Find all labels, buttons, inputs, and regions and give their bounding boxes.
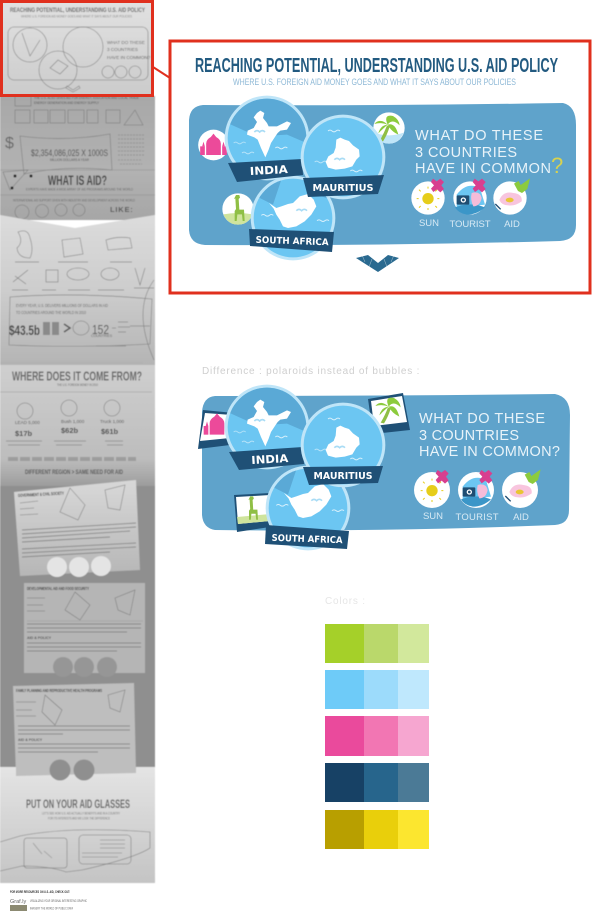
card 3: AID & POLICY bbox=[18, 738, 43, 742]
icon labels: SUN bbox=[419, 218, 439, 229]
scroll chevron bbox=[356, 255, 399, 272]
sketch section: title and hero: WHERE U.S. FOREIGN AID MONEY GOES AND WHAT IT SAYS ABOUT OUR POLICIES bbox=[21, 14, 132, 18]
icon: sun bbox=[414, 470, 450, 508]
card 3 bbox=[13, 683, 136, 776]
sketch section: where does it come from: $62b bbox=[61, 426, 79, 435]
sketch section: what is aid: $2,354,086,025 X 1000S bbox=[31, 148, 108, 158]
sketch section: what is aid: ENERGY GENERATION AND ENERGY SUPPLY bbox=[34, 101, 99, 105]
red highlight frame bbox=[170, 41, 590, 293]
swatch row: navy bbox=[325, 763, 429, 802]
connector arrow bbox=[153, 67, 170, 78]
footer resources: VISUALIZING YOUR ORIGINAL INTERESTING GRAPHIC bbox=[30, 899, 87, 903]
sketch section: aid glasses: LET'S SEE HOW U.S. AID ACTUALLY BENEFITS AND IN A COUNTRY bbox=[42, 812, 120, 816]
question heading: WHAT DO THESE bbox=[415, 128, 543, 144]
polaroid: giraffe bbox=[234, 493, 270, 532]
sketch section: aid categories and spending bbox=[0, 215, 155, 365]
footer resources: IMAGERY THE WORLD OF PUBLIC DATA bbox=[30, 906, 73, 910]
sketch section: aid categories and spending: $43.5b bbox=[9, 322, 40, 338]
sketch section: what is aid: LIKE: bbox=[110, 205, 134, 214]
sketch section: title and hero bbox=[0, 0, 153, 96]
question heading bbox=[419, 411, 560, 460]
country: south africa: SOUTH AFRICA bbox=[255, 235, 330, 248]
icon labels: TOURIST bbox=[456, 512, 499, 523]
sketch section: what is aid: INTERNATIONAL AID SUPPORT GIVEN WITH INDUSTRY AND DEVELOPMENT ACROSS THE WORLD bbox=[13, 198, 135, 202]
icon: giraffe bubble bbox=[222, 193, 254, 225]
icon labels: AID bbox=[504, 219, 520, 230]
footer resources: FOR MORE RESOURCES ON U.S. AID, CHECK OUT: bbox=[10, 890, 70, 894]
icon: tourist bbox=[458, 470, 494, 508]
swatch row: light blue bbox=[325, 670, 429, 709]
sketch section: what is aid: THE U.S. ALSO GIVES AID FOR ENERGY, EDUCATION AND LOCAL TRADE bbox=[34, 96, 139, 100]
country: india: INDIA bbox=[250, 163, 289, 178]
blue panel bbox=[189, 103, 576, 245]
sketch section: what is aid: $ bbox=[5, 135, 14, 152]
note: colors: Colors : bbox=[325, 596, 366, 607]
country: india bbox=[224, 95, 310, 182]
question heading: ? bbox=[551, 153, 563, 178]
country: mauritius bbox=[301, 403, 385, 487]
country: mauritius bbox=[301, 115, 385, 199]
card 1 bbox=[14, 480, 140, 577]
swatch row: yellow bbox=[325, 810, 429, 849]
thumbnail highlight box bbox=[2, 2, 152, 96]
country: south africa bbox=[265, 465, 351, 551]
polaroid: palm bbox=[368, 393, 410, 434]
sketch section: what is aid: MILLION DOLLARS A YEAR bbox=[50, 158, 89, 162]
country: india: INDIA bbox=[251, 452, 289, 467]
sketch section: where does it come from: THE U.S. FOREIGN MONEY IN 2010 bbox=[57, 383, 98, 387]
icon: palm bubble bbox=[373, 112, 405, 144]
left sketch strip: full infographic thumbnail bbox=[0, 0, 155, 883]
card 2: AID & POLICY bbox=[27, 636, 52, 640]
card 2 bbox=[24, 583, 145, 677]
card 1: GOVERNMENT & CIVIL SOCIETY bbox=[18, 491, 64, 498]
sketch section: what is aid: WHAT IS AID? bbox=[48, 172, 107, 188]
country: india bbox=[224, 384, 310, 470]
sketch section: title and hero: WHAT DO THESE bbox=[107, 40, 145, 45]
question heading bbox=[415, 128, 563, 178]
icon: aid bbox=[493, 178, 530, 215]
sketch section: where does it come from: $17b bbox=[15, 429, 33, 438]
question heading: HAVE IN COMMON? bbox=[419, 444, 560, 460]
sketch section: aid glasses: FOR ITS INTERESTS AND WE LOOK THE DIFFERENCE bbox=[48, 816, 110, 820]
sketch section: title and hero: REACHING POTENTIAL, UNDERSTANDING U.S. AID POLICY bbox=[10, 7, 145, 14]
sketch section: where does it come from bbox=[0, 365, 155, 490]
swatch row: green bbox=[325, 624, 429, 663]
icon: aid bbox=[502, 469, 541, 508]
card 3: FAMILY PLANNING AND REPRODUCTIVE HEALTH PROGRAMS bbox=[16, 688, 102, 693]
sketch section: where does it come from: $61b bbox=[101, 427, 119, 436]
sketch section: where does it come from: WHERE DOES IT COME FROM? bbox=[12, 368, 142, 384]
footer resources: Graf.ly bbox=[10, 899, 26, 905]
sketch section: aid glasses bbox=[0, 760, 155, 883]
sketch section: what is aid bbox=[0, 96, 155, 220]
country: mauritius: MAURITIUS bbox=[314, 471, 373, 482]
sketch section: where does it come from: DIFFERENT REGION > SAME NEED FOR AID bbox=[25, 470, 124, 476]
sketch section: aid categories and spending: 152 bbox=[92, 322, 109, 337]
card 2: DEVELOPMENTAL AID AND FOOD SECURITY bbox=[27, 586, 89, 591]
colour palette bbox=[325, 624, 429, 849]
detail frame: current design bbox=[170, 41, 590, 293]
note: difference: Difference : polaroids instead of bubbles : bbox=[202, 366, 420, 377]
icon labels: SUN bbox=[423, 511, 443, 522]
sketch section: aid categories and spending: TO COUNTRIES AROUND THE WORLD IN 2010 bbox=[16, 310, 86, 315]
icon labels: AID bbox=[513, 512, 529, 523]
question heading: 3 COUNTRIES bbox=[419, 428, 519, 444]
polaroid: taj mahal bbox=[198, 410, 234, 449]
icon labels bbox=[419, 218, 520, 230]
sketch section: aid glasses: PUT ON YOUR AID GLASSES bbox=[26, 799, 130, 811]
sketch section: where does it come from: Truck 1,000 bbox=[100, 419, 125, 424]
sketch section: aid categories and spending: EVERY YEAR, U.S. DELIVERS MILLIONS OF DOLLARS IN AID bbox=[16, 303, 108, 308]
sketch section: aid categories and spending: COUNTRIES bbox=[91, 334, 113, 338]
icon labels bbox=[423, 511, 529, 523]
footer resources bbox=[10, 890, 87, 911]
swatch row: pink bbox=[325, 716, 429, 756]
question heading: HAVE IN COMMON bbox=[415, 161, 551, 177]
sketch section: what is aid: EXPERTS HAVE MADE A WIDE ARRAY OF AID PROGRAMS AROUND THE WORLD bbox=[26, 188, 133, 192]
icon: sun bbox=[411, 179, 445, 215]
sketch section: three policy cards bbox=[0, 480, 155, 776]
question heading: WHAT DO THESE bbox=[419, 411, 545, 427]
sketch section: where does it come from: LEAD 5,000 bbox=[15, 420, 40, 425]
country: mauritius: MAURITIUS bbox=[312, 183, 374, 194]
sketch section: title and hero: HAVE IN COMMON? bbox=[107, 55, 151, 60]
country: south africa: SOUTH AFRICA bbox=[271, 533, 344, 546]
question heading: 3 COUNTRIES bbox=[415, 145, 517, 161]
icon labels: TOURIST bbox=[450, 219, 491, 230]
alternate design panel bbox=[198, 384, 570, 551]
sketch section: title and hero: 3 COUNTRIES bbox=[107, 47, 138, 52]
country: south africa bbox=[249, 175, 336, 261]
icon: tourist bbox=[453, 179, 487, 215]
icon: taj mahal bubble bbox=[198, 130, 229, 160]
blue panel bbox=[202, 394, 570, 530]
sketch section: where does it come from: Bush 1,000 bbox=[61, 419, 85, 424]
subtitle: WHERE U.S. FOREIGN AID MONEY GOES AND WHAT IT SAYS ABOUT OUR POLICIES bbox=[233, 77, 516, 88]
